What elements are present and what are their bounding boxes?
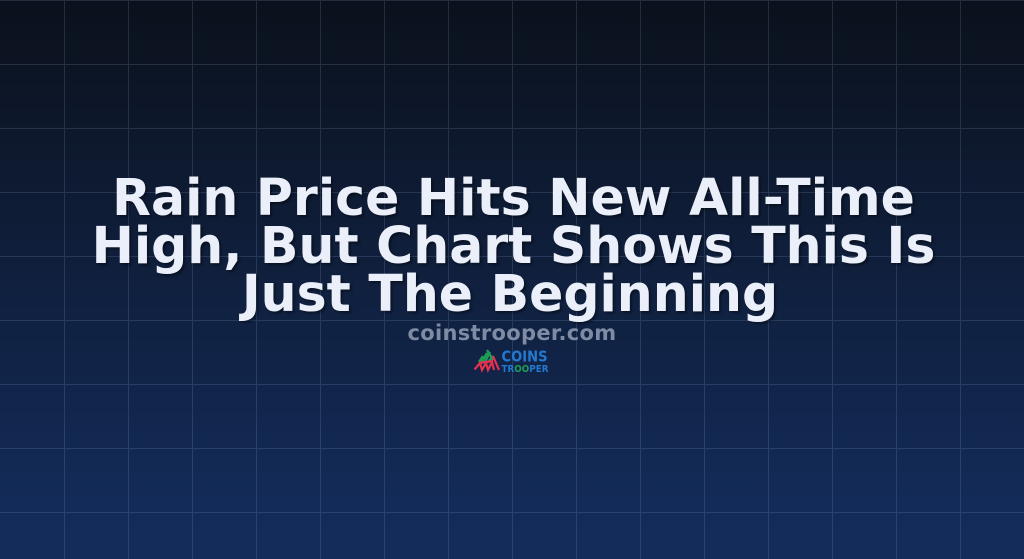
title: Rain Price Hits New All-Time	[112, 168, 915, 227]
website text: coinstrooper.com	[408, 321, 616, 345]
title: High, But Chart Shows This Is	[92, 216, 935, 275]
icon: Coins Trooper logo	[474, 348, 549, 374]
logo mark: red peak	[474, 356, 499, 370]
title: Just The Beginning	[242, 264, 778, 323]
title	[92, 168, 936, 324]
logo mark: green peak	[479, 350, 493, 362]
